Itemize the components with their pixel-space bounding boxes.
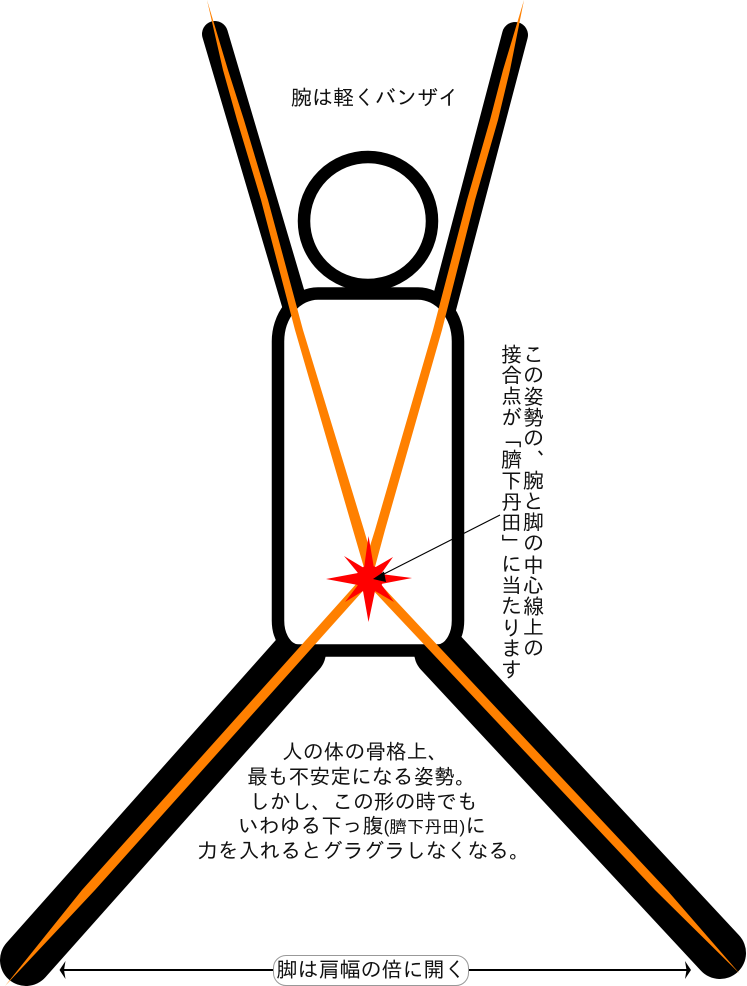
head [304, 157, 432, 285]
orange center line: left arm [207, 0, 378, 578]
red star: navel point [326, 536, 412, 622]
vertical note: navel point [499, 343, 544, 679]
width arrow between feet [60, 961, 691, 979]
vertical note: navel point: この姿勢の、腕と脚の中心線上の [521, 343, 544, 658]
torso [278, 293, 458, 650]
text line 5: 力を入れるとグラグラしなくなる。 [197, 840, 530, 863]
orange center line: right leg [362, 578, 740, 974]
right leg [440, 652, 720, 953]
label pill: leg width: 脚は肩幅の倍に開く [276, 959, 466, 982]
text line 3: しかし、この形の時でも [249, 791, 478, 814]
leader arrow to star [373, 515, 500, 582]
left arm [215, 34, 300, 320]
orange center line: left leg [5, 578, 374, 986]
text line 1: 人の体の骨格上、 [282, 741, 448, 764]
text line 4: いわゆる下っ腹(臍下丹田)に [238, 815, 486, 838]
text line 2: 最も不安定になる姿勢。 [247, 766, 476, 789]
orange center line: right arm [360, 0, 524, 578]
label: arms: 腕は軽くバンザイ [291, 87, 459, 110]
center text block [197, 741, 530, 863]
vertical note: navel point: 接合点が「臍下丹田」に当たります [499, 343, 522, 679]
right arm [440, 35, 515, 320]
left leg [26, 652, 300, 960]
